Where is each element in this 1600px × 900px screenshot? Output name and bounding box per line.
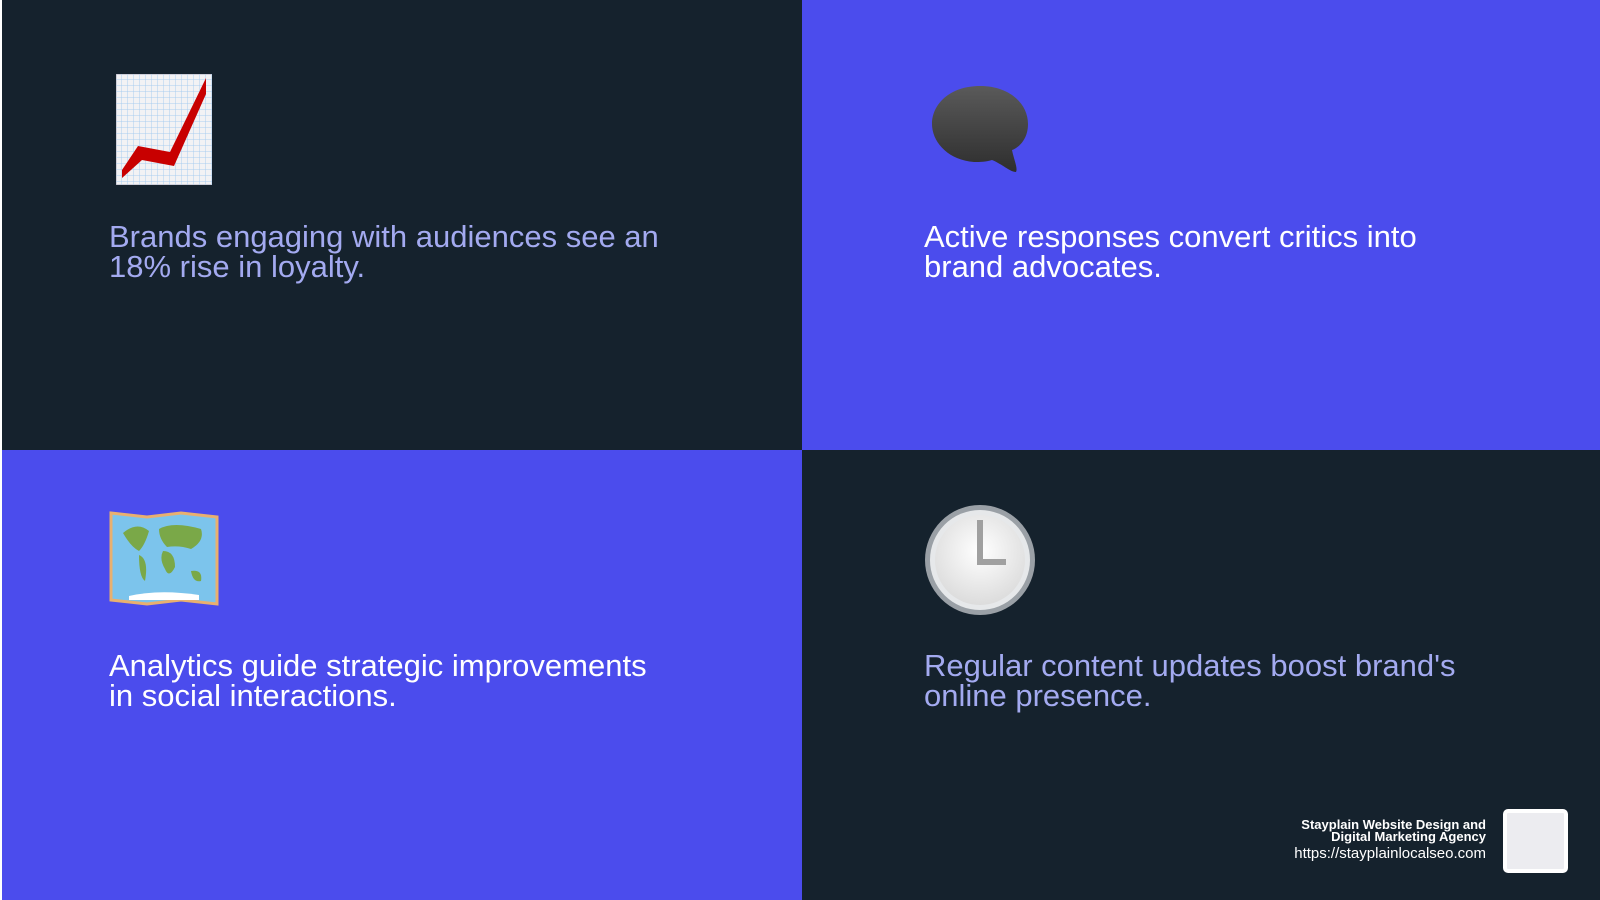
icon: world map — [110, 511, 218, 606]
text: content updates: Regular content updates boost brand's online presence. — [924, 648, 1456, 713]
footer text: https://stayplainlocalseo.com — [1294, 845, 1486, 862]
panel: critics — [802, 0, 1600, 450]
footer text: Digital Marketing Agency — [1331, 829, 1486, 844]
panel: content updates — [802, 450, 1600, 900]
panel: analytics — [2, 450, 802, 900]
footer text: Stayplain Website Design and — [1301, 817, 1486, 832]
icon: chart — [116, 74, 212, 185]
footer text — [1294, 817, 1486, 862]
icon: speech bubble — [932, 86, 1028, 172]
panel: loyalty — [2, 0, 802, 450]
text: analytics: Analytics guide strategic improvements in social interactions. — [109, 648, 647, 713]
text: loyalty: Brands engaging with audiences see an 18% rise in loyalty. — [109, 219, 659, 284]
icon: clock — [925, 505, 1035, 615]
text: critics: Active responses convert critics into brand advocates. — [924, 219, 1417, 284]
logo box — [1503, 809, 1568, 873]
footer: agency credit — [1294, 809, 1568, 873]
